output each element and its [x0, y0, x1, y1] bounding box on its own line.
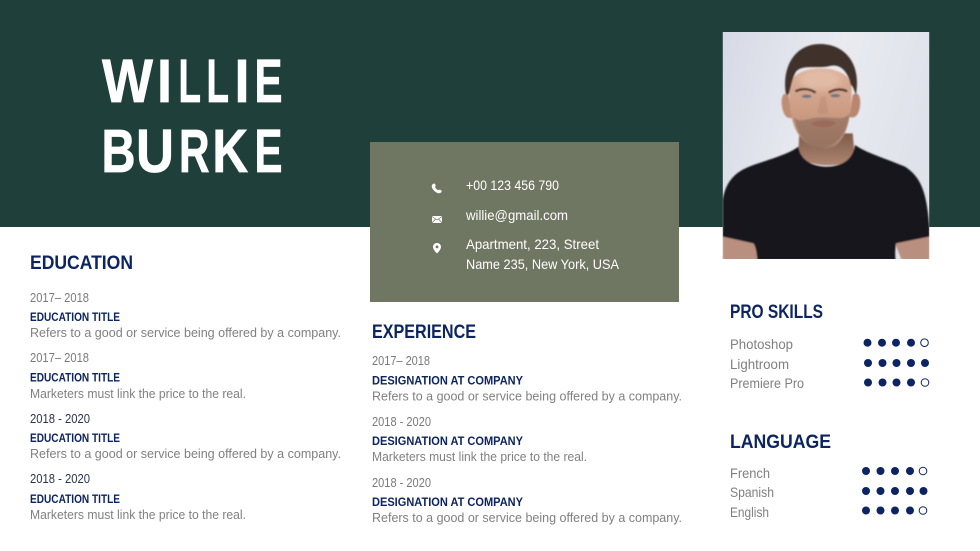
title: name: L	[206, 47, 229, 116]
education entry 4	[30, 472, 246, 522]
education entry 4: 2018 - 2020	[30, 472, 90, 486]
education entry 2: Marketers must link the price to the real.	[30, 386, 246, 401]
heading: pro skills: PRO SKILLS	[730, 301, 823, 323]
title: name: L	[178, 47, 201, 116]
skill: Lightroom: Lightroom	[730, 356, 789, 372]
heading: education: EDUCATION	[30, 252, 133, 274]
header band	[0, 0, 980, 227]
experience entry 2: Marketers must link the price to the real.	[372, 449, 587, 464]
photo: portrait	[723, 32, 929, 260]
experience entry 3	[372, 476, 682, 525]
skill: Photoshop: Photoshop	[730, 336, 793, 352]
contact address	[466, 236, 620, 272]
language: English	[730, 504, 927, 520]
education entry 1: 2017– 2018	[30, 291, 89, 305]
title: name: U	[136, 117, 174, 186]
experience entry 1: 2017– 2018	[372, 354, 430, 368]
education entry 3	[30, 412, 341, 461]
title: name: W	[102, 47, 153, 116]
language: English: English	[730, 504, 769, 520]
experience entry 2: 2018 - 2020	[372, 415, 431, 429]
title: name: I	[234, 47, 250, 116]
title: name: E	[254, 47, 282, 116]
experience entry 3: DESIGNATION AT COMPANY	[372, 495, 523, 509]
education entry 3: EDUCATION TITLE	[30, 431, 120, 445]
skill: Photoshop	[730, 336, 928, 352]
title: name: K	[212, 117, 248, 186]
experience entry 3: Refers to a good or service being offered by a company.	[372, 510, 682, 525]
skill: Lightroom	[730, 356, 929, 372]
panel: language	[730, 431, 928, 520]
skill: Premiere Pro	[730, 375, 929, 391]
education entry 2: 2017– 2018	[30, 351, 89, 365]
education entry 3: Refers to a good or service being offered by a company.	[30, 446, 341, 461]
language: Spanish: Spanish	[730, 484, 774, 500]
language: Spanish	[730, 484, 928, 500]
language: French	[730, 465, 927, 481]
education entry 3: 2018 - 2020	[30, 412, 90, 426]
title: name	[102, 47, 282, 186]
education entry 1: Refers to a good or service being offered by a company.	[30, 325, 341, 340]
heading: experience: EXPERIENCE	[372, 321, 476, 343]
education entry 4: Marketers must link the price to the real.	[30, 507, 246, 522]
panel: experience	[372, 321, 682, 525]
experience entry 2	[372, 415, 587, 464]
title: name: B	[102, 117, 136, 186]
contact address: Name 235, New York, USA	[466, 256, 620, 272]
language: French: French	[730, 465, 770, 481]
icon: location pin	[433, 243, 441, 254]
contact phone: +00 123 456 790	[466, 177, 559, 193]
title: name: I	[157, 47, 172, 116]
education entry 1: EDUCATION TITLE	[30, 310, 120, 324]
title: name: R	[179, 117, 210, 186]
heading: language: LANGUAGE	[730, 431, 831, 453]
contact email: willie@gmail.com	[465, 207, 568, 223]
education entry 2	[30, 351, 246, 401]
icon: phone	[432, 183, 442, 193]
experience entry 3: 2018 - 2020	[372, 476, 431, 490]
panel: education	[30, 252, 341, 522]
education entry 1	[30, 291, 341, 340]
title: name: E	[254, 117, 282, 186]
education entry 4: EDUCATION TITLE	[30, 492, 120, 506]
skill: Premiere Pro: Premiere Pro	[730, 375, 804, 391]
panel: contact details	[370, 142, 679, 302]
contact address: Apartment, 223, Street	[466, 236, 599, 252]
experience entry 1: DESIGNATION AT COMPANY	[372, 374, 523, 388]
experience entry 1: Refers to a good or service being offered by a company.	[372, 388, 682, 404]
experience entry 1	[372, 354, 682, 404]
experience entry 2: DESIGNATION AT COMPANY	[372, 434, 523, 448]
icon: mail	[432, 216, 442, 223]
education entry 2: EDUCATION TITLE	[30, 370, 120, 384]
panel: pro skills	[730, 301, 929, 391]
